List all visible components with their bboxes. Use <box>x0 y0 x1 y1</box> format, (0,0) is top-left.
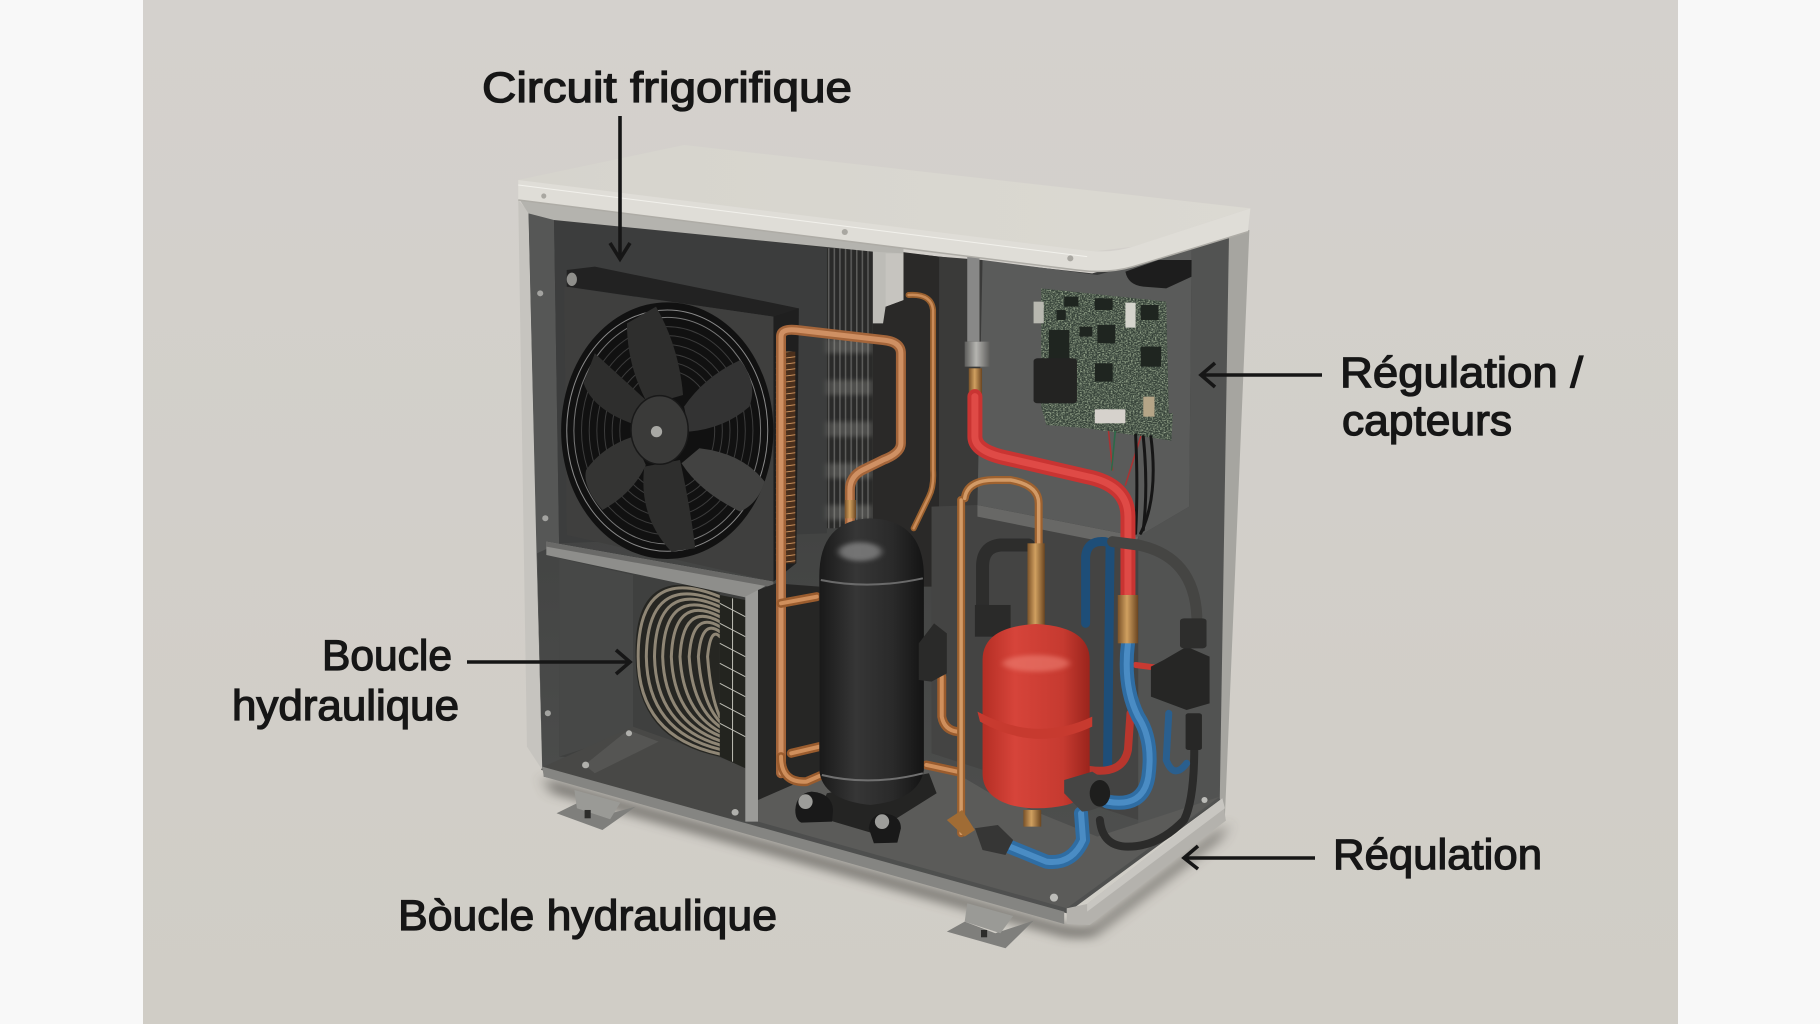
grey return hose <box>1113 542 1197 617</box>
red tank <box>977 624 1092 827</box>
right floor <box>758 763 1220 908</box>
left foot <box>557 790 636 830</box>
pipe fittings <box>965 342 990 367</box>
floor bolts <box>582 730 739 816</box>
refrigerant circuit copper pipes <box>781 330 901 773</box>
hydraulic coil <box>636 585 720 757</box>
compressor base plate <box>817 773 937 833</box>
housing panel <box>564 287 773 582</box>
condenser pipe behind <box>909 295 933 528</box>
tank nozzle <box>1023 810 1041 827</box>
shelf under fan <box>546 542 773 597</box>
mount bolts <box>798 794 889 829</box>
lid underside strip <box>520 200 903 253</box>
lid top surface <box>518 145 1250 252</box>
floor rivet <box>1050 797 1208 902</box>
electronics panel <box>977 249 1192 537</box>
left inner post <box>528 212 559 770</box>
inlet fitting <box>845 500 856 518</box>
label: Bòucle hydraulique bottom: Bòucle hydraulique <box>398 892 777 940</box>
right outer post <box>1220 230 1249 817</box>
lower copper pipes <box>781 597 957 782</box>
compressor body <box>819 518 924 805</box>
back wall <box>528 212 1230 913</box>
red return <box>1090 713 1131 771</box>
dark blue tubes <box>1086 542 1110 767</box>
board connectors <box>1034 302 1154 423</box>
top bracket <box>873 248 903 323</box>
black joint <box>1064 772 1110 812</box>
label: Boucle hydraulique left: Boucle <box>322 632 452 680</box>
floor rail <box>585 730 659 773</box>
fan housing top bar <box>567 267 799 317</box>
unit casing interior <box>518 200 1249 913</box>
label: Régulation / capteurs: Régulation / <box>1340 349 1583 397</box>
lower right wall <box>932 505 1138 820</box>
tank band <box>977 712 1092 739</box>
left post light edge <box>518 200 542 770</box>
copper loop <box>961 480 1039 833</box>
casing lid <box>518 145 1250 271</box>
condenser coil back <box>827 248 873 528</box>
right corner trim <box>1067 798 1226 925</box>
compressor left mount <box>795 792 833 823</box>
label: Boucle hydraulique left: hydraulique <box>232 682 459 730</box>
arrow: Boucle hydraulique <box>467 650 630 674</box>
brass fitting red <box>1118 595 1138 643</box>
circulator pump <box>1151 647 1210 710</box>
fan hub <box>631 396 688 464</box>
right inner post <box>1138 235 1229 853</box>
transformer <box>1034 358 1077 403</box>
compressor <box>795 500 947 843</box>
housing bolt <box>567 273 577 286</box>
panel shadow corner <box>1125 260 1192 288</box>
coil grille <box>720 595 745 768</box>
dark duct <box>873 248 939 587</box>
hot water pipe: red <box>965 257 1128 597</box>
label: Réqulation: Réqulation <box>1333 831 1542 879</box>
housing side <box>773 308 799 582</box>
bottom fitting <box>975 825 1013 855</box>
compressor rings <box>821 578 923 585</box>
post rivets <box>537 290 551 716</box>
control board <box>1034 288 1173 441</box>
grey pipe <box>967 257 979 342</box>
label: Boucle hydraulique left <box>232 632 459 730</box>
dark gap <box>758 583 819 800</box>
label: Régulation / capteurs <box>1340 349 1583 445</box>
fan blades <box>584 307 765 552</box>
wires <box>1109 432 1153 533</box>
hub bolt <box>651 426 662 437</box>
compartment floor <box>544 727 745 822</box>
pump fittings <box>1180 618 1207 648</box>
lower pipework <box>947 480 1210 862</box>
blue pipe: bottom <box>1006 813 1083 862</box>
label: Régulation / capteurs: capteurs <box>1342 397 1512 445</box>
board <box>1041 288 1173 441</box>
red pipe <box>975 397 1128 597</box>
arrow: Réqulation <box>1184 846 1315 869</box>
tank highlight <box>1003 655 1069 672</box>
label: Circuit frigorifique: Circuit frigorifique <box>482 64 852 112</box>
terminal box <box>919 623 947 682</box>
arrow: Régulation / capteurs <box>1201 363 1322 387</box>
spring coil <box>776 352 795 563</box>
compressor right mount <box>869 813 901 843</box>
fan guard <box>561 302 773 559</box>
shelf post <box>745 590 758 822</box>
lid screws <box>541 193 1073 261</box>
compressor highlight <box>839 542 882 561</box>
front floor lip <box>542 767 1064 924</box>
lid front band <box>518 180 1250 271</box>
right foot <box>947 903 1034 948</box>
lower left compartment <box>542 542 1226 925</box>
arrow: Circuit frigorifique <box>610 116 630 259</box>
fan unit <box>561 267 799 582</box>
compartment wall <box>559 558 745 767</box>
dark pipes <box>983 545 1028 607</box>
chips <box>1049 297 1161 382</box>
left upper wall <box>554 217 827 543</box>
ground shadow <box>544 777 1227 938</box>
blue pipe: riser <box>1108 643 1150 803</box>
support feet <box>557 790 1034 948</box>
brass fitting stack <box>1027 543 1045 630</box>
